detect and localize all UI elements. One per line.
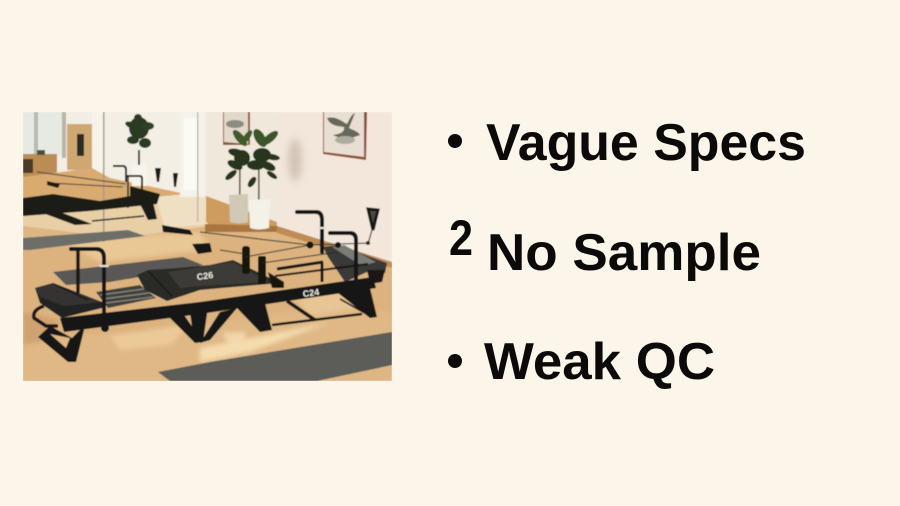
painting on wall	[323, 112, 367, 160]
main rear mat	[53, 257, 203, 285]
main reformer	[34, 209, 392, 381]
bullet 1	[448, 134, 462, 148]
wall shadow	[288, 138, 302, 182]
shoulder blocks	[242, 246, 284, 288]
right platform	[323, 245, 387, 282]
legs	[38, 288, 377, 362]
main rail	[60, 277, 376, 332]
item: No Sample: No Sample	[487, 224, 761, 282]
potted plants	[224, 127, 280, 230]
rear inner rails	[275, 262, 368, 282]
ropes	[200, 232, 370, 263]
cross bars	[272, 299, 372, 325]
hanging strap handle	[366, 209, 378, 245]
list of risks	[448, 114, 806, 391]
left post with handle bar	[71, 249, 108, 326]
photo: pilates reformers in a studio	[23, 112, 392, 381]
mirror reflection: room	[23, 112, 392, 268]
front floor mat	[158, 332, 392, 381]
right post with handle bars	[297, 212, 356, 302]
bullet 3	[448, 354, 462, 368]
left foot handle	[34, 306, 58, 326]
model label C24: C24	[302, 287, 320, 299]
item: Weak QC: Weak QC	[484, 333, 715, 391]
rope loop handles	[162, 225, 212, 254]
model label C26: C26	[196, 270, 214, 282]
mirrored mat	[23, 230, 145, 250]
studio wall and floor	[23, 112, 392, 381]
mirrored plant	[124, 114, 154, 186]
left platform	[35, 283, 102, 318]
marker: 2: 2	[449, 210, 473, 266]
reflected painting	[223, 112, 250, 145]
slats	[96, 285, 156, 308]
item: Vague Specs: Vague Specs	[486, 114, 806, 172]
mirrored reformer	[23, 166, 178, 225]
carriage C26	[137, 260, 280, 301]
